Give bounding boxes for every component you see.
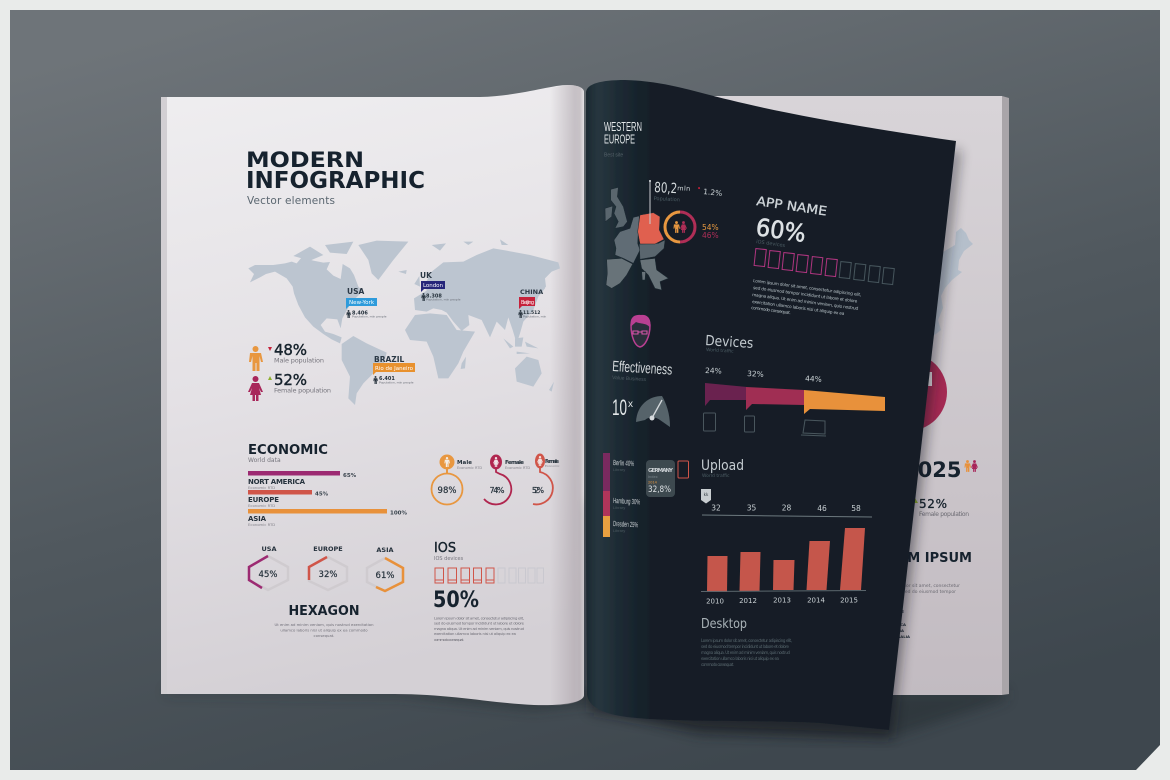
- map label: China: [518, 288, 546, 318]
- city share column: Hamburg 30%: [613, 496, 641, 506]
- hexagon chart: USA: 45%: [259, 570, 277, 580]
- ring chart: male 98%: [432, 454, 482, 504]
- hexagon text block: Ut enim ad minim veniam, quis nostrud exercitation: [274, 622, 374, 627]
- device icon row: [435, 568, 544, 583]
- ring chart: male 98%: 98%: [438, 486, 456, 496]
- map fragment on right page: [925, 228, 973, 337]
- ring chart: female 74%: 74%: [490, 486, 505, 495]
- shadows under the brochure: [166, 690, 1006, 738]
- bar: Asia: ASIA: [248, 515, 267, 523]
- city share column: Berlin 40%: [613, 458, 635, 468]
- female population stat: 52%: [274, 371, 307, 389]
- icon: gauge: [636, 396, 670, 427]
- callout line to Germany: [649, 180, 651, 224]
- chart values: 58: [851, 504, 861, 513]
- map label: UK: Population, mln people: [426, 298, 461, 302]
- panel: left page: [161, 85, 584, 706]
- panel: economic bars: [248, 443, 407, 527]
- gender percentages: 46%: [702, 231, 719, 240]
- device share labels: 32%: [747, 369, 764, 379]
- map label: UK: UK: [420, 271, 433, 280]
- hexagon text block: ullamco laboris nisi ut aliquip ex ea commodo: [280, 628, 368, 632]
- chart years: 2014: [807, 596, 825, 604]
- ring chart: male 98%: Male: [457, 460, 472, 466]
- region list: AUSTRALIA: [886, 634, 910, 639]
- app text block: Lorem ipsum dolor sit amet, consectetur adipiscing elit,: [753, 278, 862, 298]
- heading: Western Europe: WESTERN: [604, 120, 642, 134]
- region list: [886, 609, 910, 639]
- hexagon chart: USA: USA: [262, 545, 276, 553]
- Germany card: Index: [648, 475, 658, 479]
- IOS text block: [434, 616, 525, 642]
- city share column: Library: [613, 528, 625, 533]
- bar: Asia: [248, 509, 407, 527]
- chart years: 2010: [706, 598, 724, 606]
- hexagon text block: [274, 622, 374, 638]
- bar: North America: 65%: [343, 473, 357, 479]
- device icon row: [754, 249, 894, 285]
- map label: UK: 8.308: [426, 294, 442, 300]
- chart values: 32: [711, 504, 721, 512]
- panel: IOS devices: [433, 541, 544, 642]
- lorem paragraph on right page: [884, 583, 960, 595]
- heading: Western Europe: Best site: [604, 152, 623, 158]
- lorem paragraph on right page: ipsum dolor sit amet, consectetur: [884, 583, 960, 589]
- hexagon chart: Asia: [367, 546, 403, 591]
- IOS text block: sed do eiusmod tempor incididunt ut labore et dolore: [434, 620, 525, 626]
- panel: right page underneath: [590, 96, 1009, 695]
- map label: USA: USA: [347, 287, 364, 296]
- map label: China: Population, mln: [523, 314, 546, 318]
- gender percentages: 54%: [702, 223, 719, 232]
- panel: IOS devices: IOS: [434, 541, 456, 556]
- chart years: [706, 596, 858, 606]
- city share column: [603, 453, 641, 537]
- device share labels: [705, 366, 822, 384]
- Germany card: GERMANY: [648, 468, 674, 474]
- title: MODERN: [246, 148, 364, 173]
- icon: head with glasses: [631, 315, 651, 347]
- bar: North America: [248, 471, 357, 490]
- chart values: 28: [782, 504, 791, 512]
- desktop text block: magna aliqua. Ut enim ad minim veniam, quis nostrud: [701, 650, 790, 655]
- app text block: exercitation ullamco laboris nisi ut aliquip ex ea: [752, 299, 845, 317]
- IOS text block: magna aliqua. Ut enim ad minim veniam, quis nostrud: [434, 626, 525, 631]
- female population stat: Female population: [274, 386, 331, 394]
- year figure: 2025: [903, 458, 961, 482]
- panel: upload chart: Upload: [701, 458, 744, 474]
- bar: Europe: 45%: [315, 492, 329, 498]
- map label: USA: New-York: [349, 300, 375, 306]
- hexagon chart: Asia: ASIA: [376, 546, 394, 554]
- map label: USA: Population, mln people: [352, 314, 387, 318]
- panel: app name: [751, 193, 894, 317]
- desktop text block: [701, 638, 792, 667]
- bar: Europe: [248, 490, 329, 508]
- bar: Asia: Economic RTD: [248, 522, 275, 527]
- growth figure: 1.2%: [703, 187, 723, 198]
- panel: economic bars: ECONOMIC: [248, 443, 328, 458]
- app text block: magna aliqua. Ut enim ad minim veniam, quis nostrud: [752, 292, 859, 312]
- desktop text block: commodo consequat.: [701, 662, 734, 667]
- population figure: [653, 180, 691, 204]
- device share labels: 24%: [705, 366, 722, 376]
- female population stat: 52%: [919, 497, 947, 511]
- ring chart: female 52%: [532, 454, 560, 504]
- city share column: Library: [613, 505, 625, 510]
- male population stat: 48%: [274, 341, 307, 359]
- bar: Asia: 100%: [390, 510, 407, 516]
- world map: [248, 239, 560, 405]
- male population stat: Male population: [274, 356, 324, 364]
- red circle on right page: [869, 353, 947, 431]
- population figure: 80,2: [654, 180, 678, 197]
- map label: China: Beijing: [521, 300, 534, 306]
- app text block: [751, 278, 862, 317]
- chart values: 46: [817, 504, 827, 513]
- map label: UK: London: [423, 283, 444, 289]
- chart years: 2013: [773, 596, 791, 604]
- lorem ipsum heading: LOREM IPSUM: [870, 551, 972, 566]
- female population stat: [912, 497, 969, 518]
- panel: upload chart: World traffic: [702, 473, 730, 479]
- map label: USA: [346, 287, 387, 318]
- female population stat: [248, 371, 331, 401]
- IOS text block: Lorem ipsum dolor sit amet, consectetur adipiscing elit,: [434, 616, 524, 620]
- ribbon: smartphones: [746, 387, 804, 410]
- gender percentages: [702, 223, 719, 240]
- bar: North America: NORT AMERICA: [248, 478, 306, 486]
- IOS text block: exercitation ullamco laboris nisi ut aliquip ex ea: [434, 631, 516, 636]
- desktop text block: sed do eiusmod tempor incididunt ut labore et dolore: [701, 644, 790, 649]
- mini people icons: [964, 460, 978, 472]
- device share labels: 44%: [805, 374, 822, 384]
- map label: China: CHINA: [520, 288, 543, 296]
- ring chart: female 52%: Female: [545, 459, 560, 465]
- map label: Brazil: BRAZIL: [374, 355, 405, 364]
- chart values: 35: [747, 504, 756, 512]
- hexagon text block: consequat.: [314, 633, 334, 638]
- bar: North America: Economic RTD: [248, 485, 275, 490]
- shadow of the turned page: [590, 150, 960, 738]
- panel: app name: iOS devices: [756, 239, 786, 249]
- ring chart: female 52%: Economic: [545, 464, 560, 468]
- panel: app name: 60%: [754, 213, 808, 248]
- title: [246, 148, 425, 194]
- city share column: Dresden 25%: [613, 519, 639, 529]
- ring chart: female 74%: Economic RTD: [505, 466, 530, 470]
- 10x stat: 10: [612, 395, 627, 420]
- map label: UK: [420, 271, 461, 302]
- hexagon chart: Europe: EUROPE: [313, 545, 343, 553]
- subtitle: Vector elements: [247, 195, 335, 207]
- ring chart: female 74%: [484, 454, 530, 504]
- Germany card: 2014: [648, 480, 658, 484]
- female population stat: Female population: [919, 511, 969, 518]
- population figure: mln: [677, 184, 690, 193]
- panel: devices chart: [704, 333, 885, 436]
- hexagon chart: USA: [249, 545, 288, 590]
- bar: Europe: EUROPE: [248, 496, 279, 504]
- heading: Effectiveness: Effectiveness: [612, 358, 673, 379]
- chart values: [711, 504, 861, 513]
- male population stat: [249, 341, 324, 371]
- heading: Western Europe: [604, 120, 642, 158]
- ring chart: male 98%: Economic RTD: [457, 466, 482, 470]
- panel: IOS devices: 50%: [433, 588, 479, 613]
- region list: AMERICA: [887, 622, 906, 627]
- heading: Western Europe: EUROPE: [604, 132, 635, 146]
- icon: tablet: [678, 461, 688, 478]
- app text block: commodo consequat.: [751, 305, 791, 316]
- panel: upload chart: [701, 458, 872, 606]
- title: INFOGRAPHIC: [246, 168, 425, 194]
- panel: economic bars: World data: [248, 457, 281, 464]
- region list: ASIA: [894, 628, 904, 633]
- heading: Effectiveness: [612, 358, 673, 383]
- ribbon: desktops: [804, 390, 885, 414]
- heading: Desktop: Desktop: [701, 616, 747, 632]
- map label: Brazil: Population, mln people: [379, 380, 414, 384]
- IOS text block: commodo consequat.: [434, 637, 464, 642]
- heading: Effectiveness: Value Business: [612, 375, 647, 383]
- population figure: Population: [653, 196, 680, 203]
- hexagon chart: Europe: [309, 545, 347, 590]
- chart years: 2015: [840, 596, 858, 604]
- gender ring: [665, 212, 695, 242]
- device outlines: [704, 413, 826, 436]
- tag marker: kk: [704, 492, 709, 497]
- ring chart: female 74%: Female: [505, 460, 524, 466]
- panel: app name: APP NAME: [756, 193, 828, 218]
- panel: devices chart: Devices: [705, 333, 754, 352]
- map label: China: 11.512: [523, 310, 540, 316]
- city share column: Library: [613, 467, 625, 472]
- desktop text block: exercitation ullamco laboris nisi ut aliquip ex ea: [701, 656, 780, 661]
- bar chart: [707, 528, 865, 592]
- bar: Europe: Economic RTD: [248, 503, 275, 508]
- hexagon chart: Europe: 32%: [319, 570, 337, 580]
- app text block: sed do eiusmod tempor incididunt ut labore et dolore: [753, 285, 858, 305]
- lorem paragraph on right page: elit, sed do eiusmod tempor: [893, 589, 956, 595]
- Germany card: [646, 460, 675, 497]
- 10x stat: x: [628, 399, 633, 410]
- map label: USA: 8.406: [352, 310, 368, 316]
- chart years: 2012: [739, 597, 757, 605]
- region list: EUROPE: [887, 609, 904, 614]
- map label: Brazil: [373, 355, 415, 384]
- hexagon chart: Asia: 61%: [376, 571, 394, 581]
- map label: Brazil: 6.401: [379, 376, 395, 382]
- panel: dark turned page: [586, 80, 956, 730]
- desktop text block: Lorem ipsum dolor sit amet, consectetur adipiscing elit,: [701, 638, 792, 643]
- ribbon: tablets: [705, 383, 747, 406]
- panel: devices chart: World traffic: [706, 347, 734, 355]
- map label: Brazil: Rio de Janeiro: [375, 366, 414, 372]
- ring chart: female 52%: 52%: [532, 486, 544, 495]
- Germany card: 32,8%: [648, 485, 671, 495]
- tag marker: [701, 489, 711, 504]
- map of western Europe: [605, 187, 668, 290]
- hexagon heading: HEXAGON: [288, 604, 360, 619]
- panel: IOS devices: IOS devices: [434, 556, 464, 562]
